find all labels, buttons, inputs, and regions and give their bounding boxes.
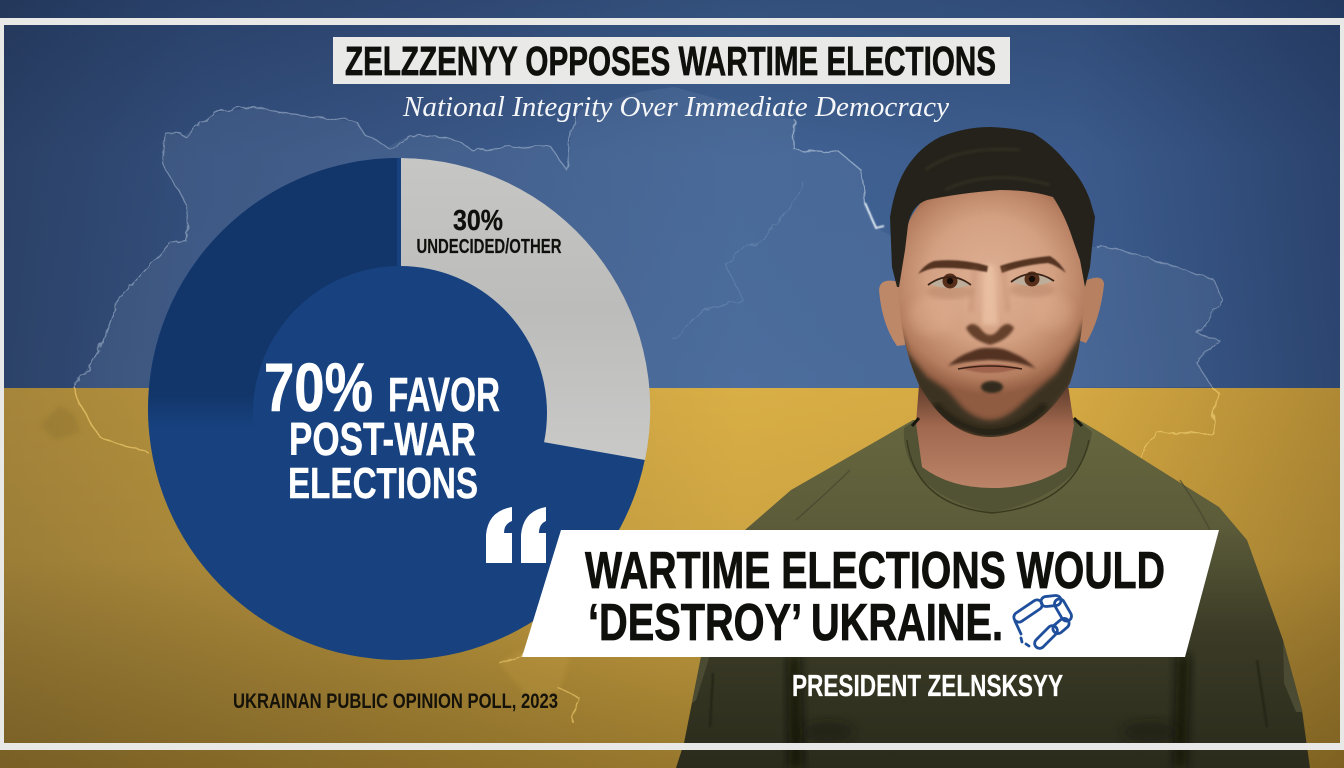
label: 70%: 70% (264, 349, 373, 426)
label: post-war: POST-WAR (289, 413, 476, 465)
chart segment: 70% favor (blue) (148, 158, 650, 660)
callout: quote box (522, 530, 1219, 657)
sweater (676, 420, 1310, 768)
portrait of the president (676, 127, 1310, 768)
eyebrows (918, 260, 988, 274)
icon: broken chain (1012, 595, 1073, 650)
beard (900, 320, 1084, 442)
source caption: UKRAINAN PUBLIC OPINION POLL, 2023 (233, 690, 558, 713)
nose (966, 324, 1014, 345)
chart segment: darker quadrant (148, 158, 397, 430)
label: favor: FAVOR (388, 369, 500, 422)
face (898, 172, 1085, 437)
chart segment: 30% undecided (grey) (401, 158, 650, 460)
moustache and mouth (948, 348, 1036, 369)
panel: donut chart (148, 158, 650, 660)
label: undecided/other: UNDECIDED/OTHER (416, 236, 562, 258)
eyes (926, 285, 974, 299)
title banner: ZELZZENYY OPPOSES WARTIME ELECTIONS (345, 38, 996, 84)
chart centre disc (253, 266, 547, 560)
collar (904, 420, 1092, 513)
subtitle: National Integrity Over Immediate Democracy (402, 91, 949, 123)
quote line 1: WARTIME ELECTIONS WOULD (585, 542, 1165, 600)
icon: quotation mark (486, 507, 546, 563)
ears (879, 281, 905, 346)
face shading (900, 265, 1084, 442)
hair (890, 127, 1095, 287)
sweater shading (690, 640, 1303, 768)
label: 30%: 30% (453, 205, 503, 237)
attribution: PRESIDENT ZELNSKSYY (792, 668, 1063, 703)
quote line 2: ‘DESTROY’ UKRAINE. (588, 594, 1003, 652)
label: elections: ELECTIONS (288, 459, 478, 508)
neck (916, 385, 1074, 488)
map outline of Ukraine (40, 87, 1223, 723)
chin patch (981, 381, 1003, 393)
